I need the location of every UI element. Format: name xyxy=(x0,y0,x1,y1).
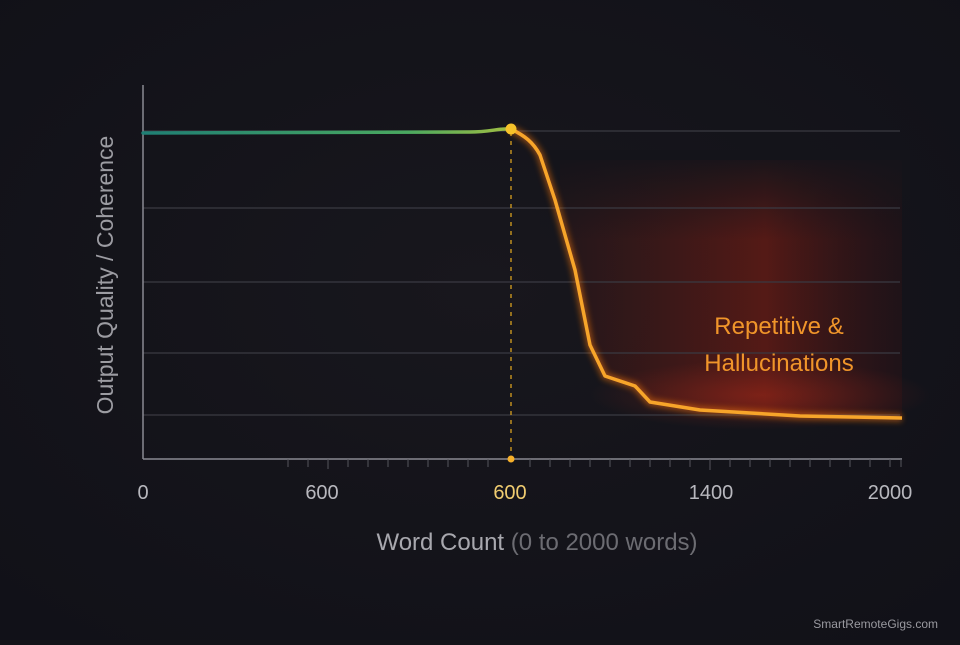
y-axis title: Output Quality / Coherence xyxy=(92,136,118,414)
chart: Hallucinations xyxy=(704,350,854,377)
ticks xyxy=(288,459,901,470)
curve: quality line xyxy=(143,129,902,418)
axis marker xyxy=(508,456,514,462)
x labels: 2000 xyxy=(868,482,912,504)
peak marker xyxy=(506,124,516,134)
grid lines xyxy=(143,131,900,415)
x labels: 600 xyxy=(493,482,527,504)
watermark: SmartRemoteGigs.com xyxy=(813,617,938,631)
x labels: 1400 xyxy=(689,482,733,504)
x labels: 600 xyxy=(305,482,339,504)
x labels xyxy=(137,482,912,504)
red shaded zone xyxy=(540,150,930,430)
threshold dashed line xyxy=(510,132,512,458)
x labels: 0 xyxy=(137,482,149,504)
x-axis title: Word Count (0 to 2000 words) xyxy=(376,529,698,556)
axes xyxy=(143,85,902,459)
callout text: Repetitive & xyxy=(714,313,844,340)
